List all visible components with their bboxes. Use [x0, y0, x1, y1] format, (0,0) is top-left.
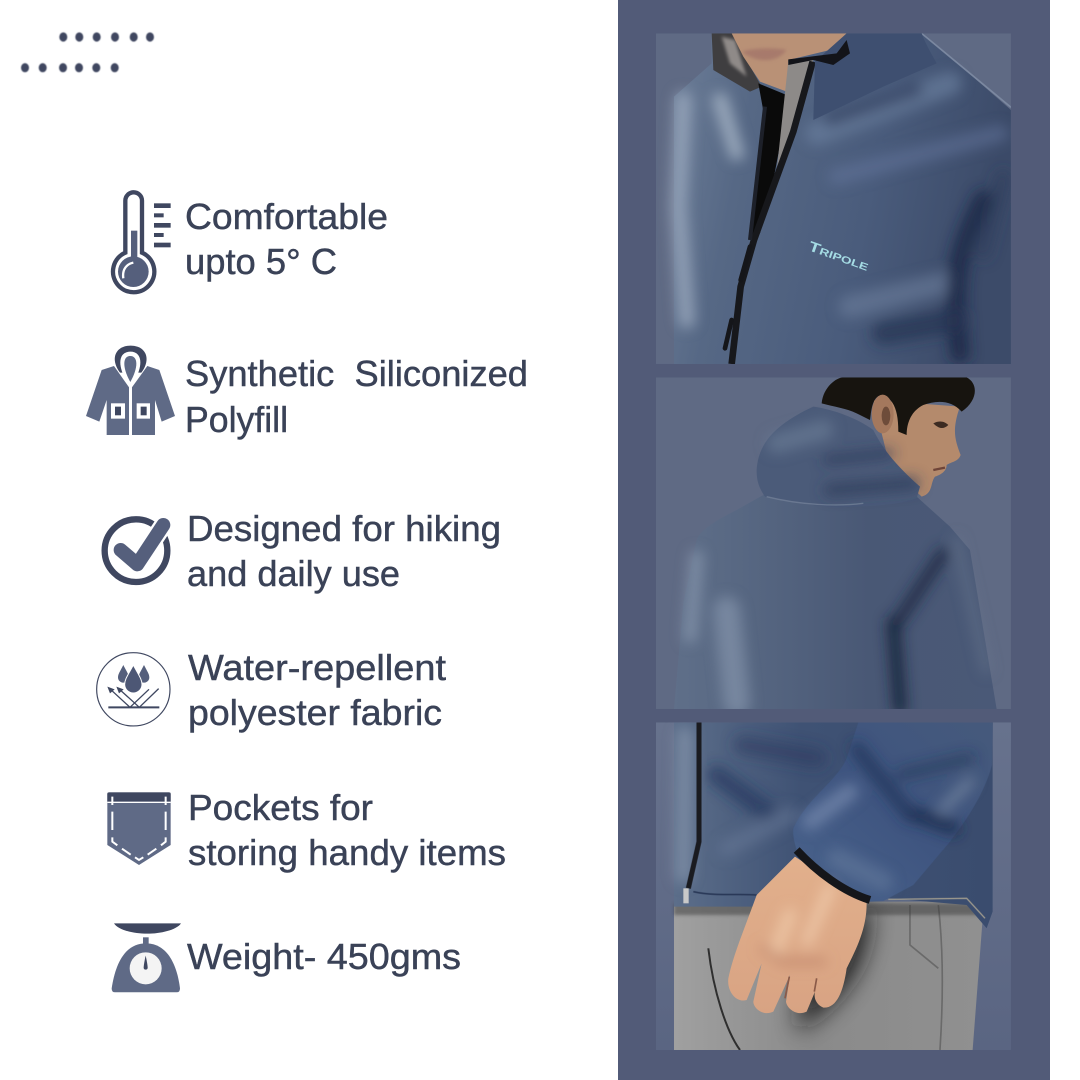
jacket body — [747, 495, 996, 709]
zipper — [732, 62, 813, 364]
ear — [872, 395, 894, 433]
icon: kitchen scale — [112, 923, 181, 992]
icon: thermometer — [113, 192, 171, 292]
feature: polyfill — [86, 346, 528, 435]
inner collar lining — [712, 33, 762, 92]
text: upto 5 degrees: upto 5° C — [185, 241, 337, 282]
face and neck — [732, 33, 847, 92]
text: comfortable: Comfortable — [185, 196, 388, 237]
text: weight: Weight- 450gms — [187, 936, 461, 977]
cuff — [797, 850, 870, 900]
zipper — [688, 722, 699, 888]
feature: weight — [112, 923, 461, 992]
text: polyester fabric: polyester fabric — [188, 692, 442, 733]
feature: water repellent — [97, 647, 446, 726]
feature: pockets — [107, 787, 373, 865]
photo: jacket front with logo — [656, 33, 1011, 364]
text: designed for hiking: Designed for hiking — [187, 508, 501, 549]
panel: photo column background — [618, 0, 1050, 1080]
feature: comfortable temperature — [113, 192, 388, 292]
sleeve — [793, 722, 993, 902]
icon: pocket — [107, 792, 171, 865]
text: daily use: and daily use — [187, 553, 400, 594]
jacket body — [674, 722, 993, 928]
black inner shirt — [750, 83, 787, 237]
jacket body — [674, 33, 1011, 364]
text: pockets for: Pockets for — [188, 787, 373, 828]
text: water repellent: Water-repellent — [188, 647, 446, 688]
icon: check in ring — [105, 519, 167, 582]
decorative dot rows — [21, 32, 154, 72]
hand — [728, 857, 867, 1013]
trousers — [674, 902, 984, 1050]
logo: TRIPOLE — [807, 238, 871, 274]
text: polyfill: Polyfill — [185, 399, 288, 440]
text: synthetic siliconized: Synthetic Siliconized — [185, 353, 528, 394]
hood — [757, 407, 920, 507]
collar — [813, 33, 937, 120]
feature: hiking — [105, 508, 501, 582]
grey lining — [775, 60, 813, 187]
hem trim — [888, 898, 985, 918]
face — [873, 400, 961, 497]
icon: hooded jacket — [86, 346, 175, 435]
photo: hand and cuff — [656, 722, 1011, 1050]
icon: water drops on fabric — [97, 653, 170, 726]
photo: hood back view — [656, 377, 1011, 709]
hair — [822, 377, 975, 435]
text: storing handy items: storing handy items — [188, 832, 506, 873]
